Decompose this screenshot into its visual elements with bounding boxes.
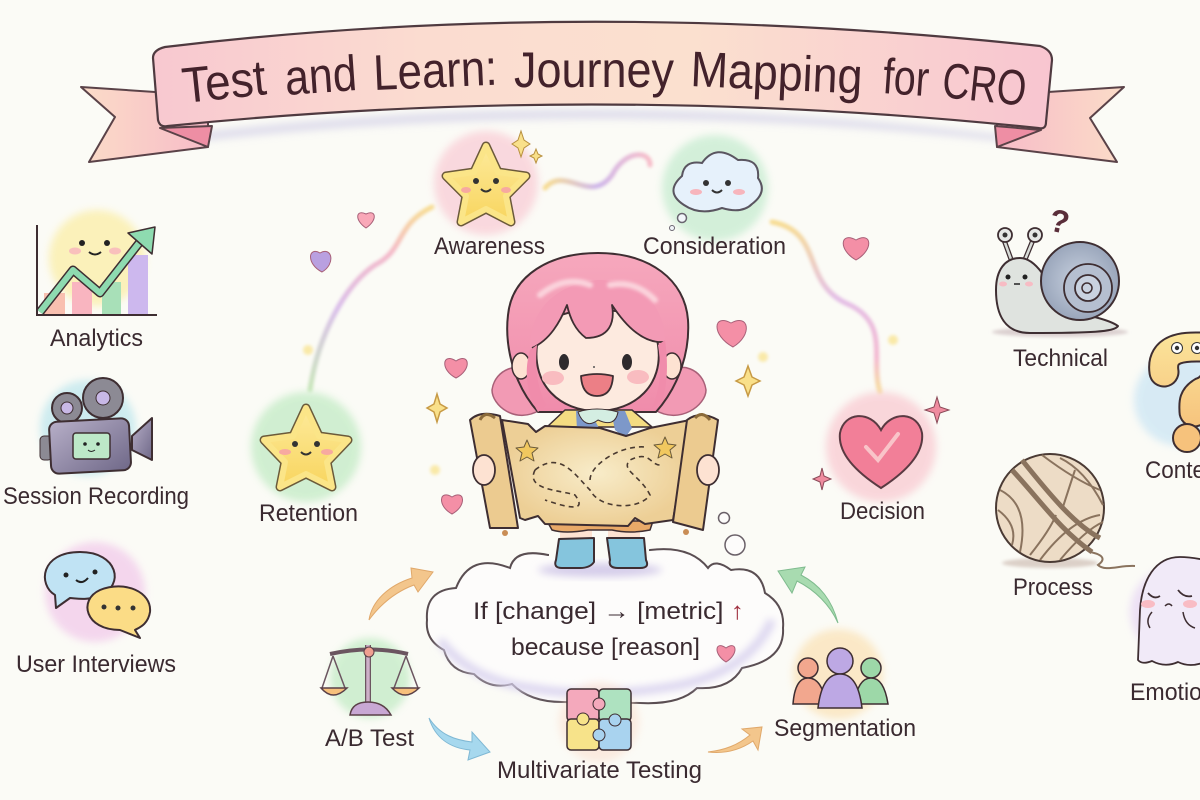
thought bubbles — [718, 512, 745, 555]
title: CRO — [940, 52, 1029, 117]
user interviews icon: User Interviews — [16, 651, 176, 678]
map sheet — [502, 420, 690, 526]
session recording icon: Session Recording — [3, 483, 189, 510]
node: multivariate testing: Multivariate Testing — [497, 757, 702, 784]
node: segmentation: Segmentation — [774, 715, 916, 742]
title: and — [283, 45, 359, 106]
title — [179, 40, 1029, 117]
boots — [555, 538, 594, 568]
analytics icon: Analytics — [50, 325, 143, 352]
analytics icon — [37, 210, 157, 352]
map scrolls — [470, 414, 518, 528]
node: awareness: Awareness — [434, 233, 545, 260]
title: Mapping — [690, 41, 864, 104]
arrow: multivariate to segmentation — [708, 727, 762, 753]
process icon: yarn — [996, 454, 1135, 601]
hair highlights — [540, 282, 655, 300]
character with treasure map — [470, 253, 719, 568]
face — [536, 310, 659, 411]
node: A/B test — [321, 638, 419, 752]
node: retention — [251, 392, 361, 527]
hypothesis cloud — [427, 540, 783, 703]
bangs edge — [532, 305, 665, 348]
map route — [533, 447, 660, 507]
title banner — [81, 22, 1124, 162]
arrow: A/B test to hypothesis — [369, 568, 433, 620]
node: multivariate testing — [497, 682, 702, 784]
node: decision — [813, 392, 949, 525]
journey path: awareness to consideration — [545, 155, 650, 188]
title: Journey — [514, 42, 674, 98]
technical icon: snail: ? — [1046, 202, 1073, 241]
map stars — [516, 440, 538, 461]
technical icon: snail — [992, 202, 1128, 372]
skirt — [547, 521, 653, 532]
legs — [560, 530, 592, 542]
user interviews icon — [16, 542, 176, 678]
process icon: yarn: Process — [1013, 574, 1093, 601]
ears — [512, 353, 530, 379]
node: retention: Retention — [259, 500, 358, 527]
node: consideration — [643, 135, 786, 260]
title: Learn: — [372, 40, 498, 101]
node: segmentation — [774, 629, 916, 742]
eyes and mouth — [559, 354, 569, 370]
node: consideration: Consideration — [643, 233, 786, 260]
sparkles — [427, 366, 760, 422]
journey path: retention to awareness — [310, 207, 432, 390]
journey path: consideration to decision — [772, 222, 880, 392]
hands — [473, 455, 495, 485]
emotional icon: ghost — [1130, 557, 1200, 706]
node: decision: Decision — [840, 498, 925, 525]
technical icon: snail: Technical — [1013, 345, 1108, 372]
arrow: A/B test to multivariate — [429, 718, 490, 760]
content icon — [1134, 342, 1200, 484]
node: A/B test: A/B Test — [325, 725, 414, 752]
hair back — [507, 253, 688, 412]
glow dots — [303, 335, 898, 475]
title: Test — [179, 49, 269, 114]
hypothesis cloud: because [reason] — [511, 634, 700, 661]
node: awareness — [434, 131, 545, 260]
hypothesis text: If [change] → [metric] ↑ — [473, 598, 744, 625]
title: for — [881, 48, 931, 107]
pigtails — [492, 367, 706, 415]
session recording icon — [3, 378, 189, 510]
floating hearts — [310, 213, 869, 514]
bangs — [530, 280, 665, 348]
arrow: segmentation to hypothesis — [778, 567, 838, 623]
shirt and collar — [547, 410, 652, 427]
